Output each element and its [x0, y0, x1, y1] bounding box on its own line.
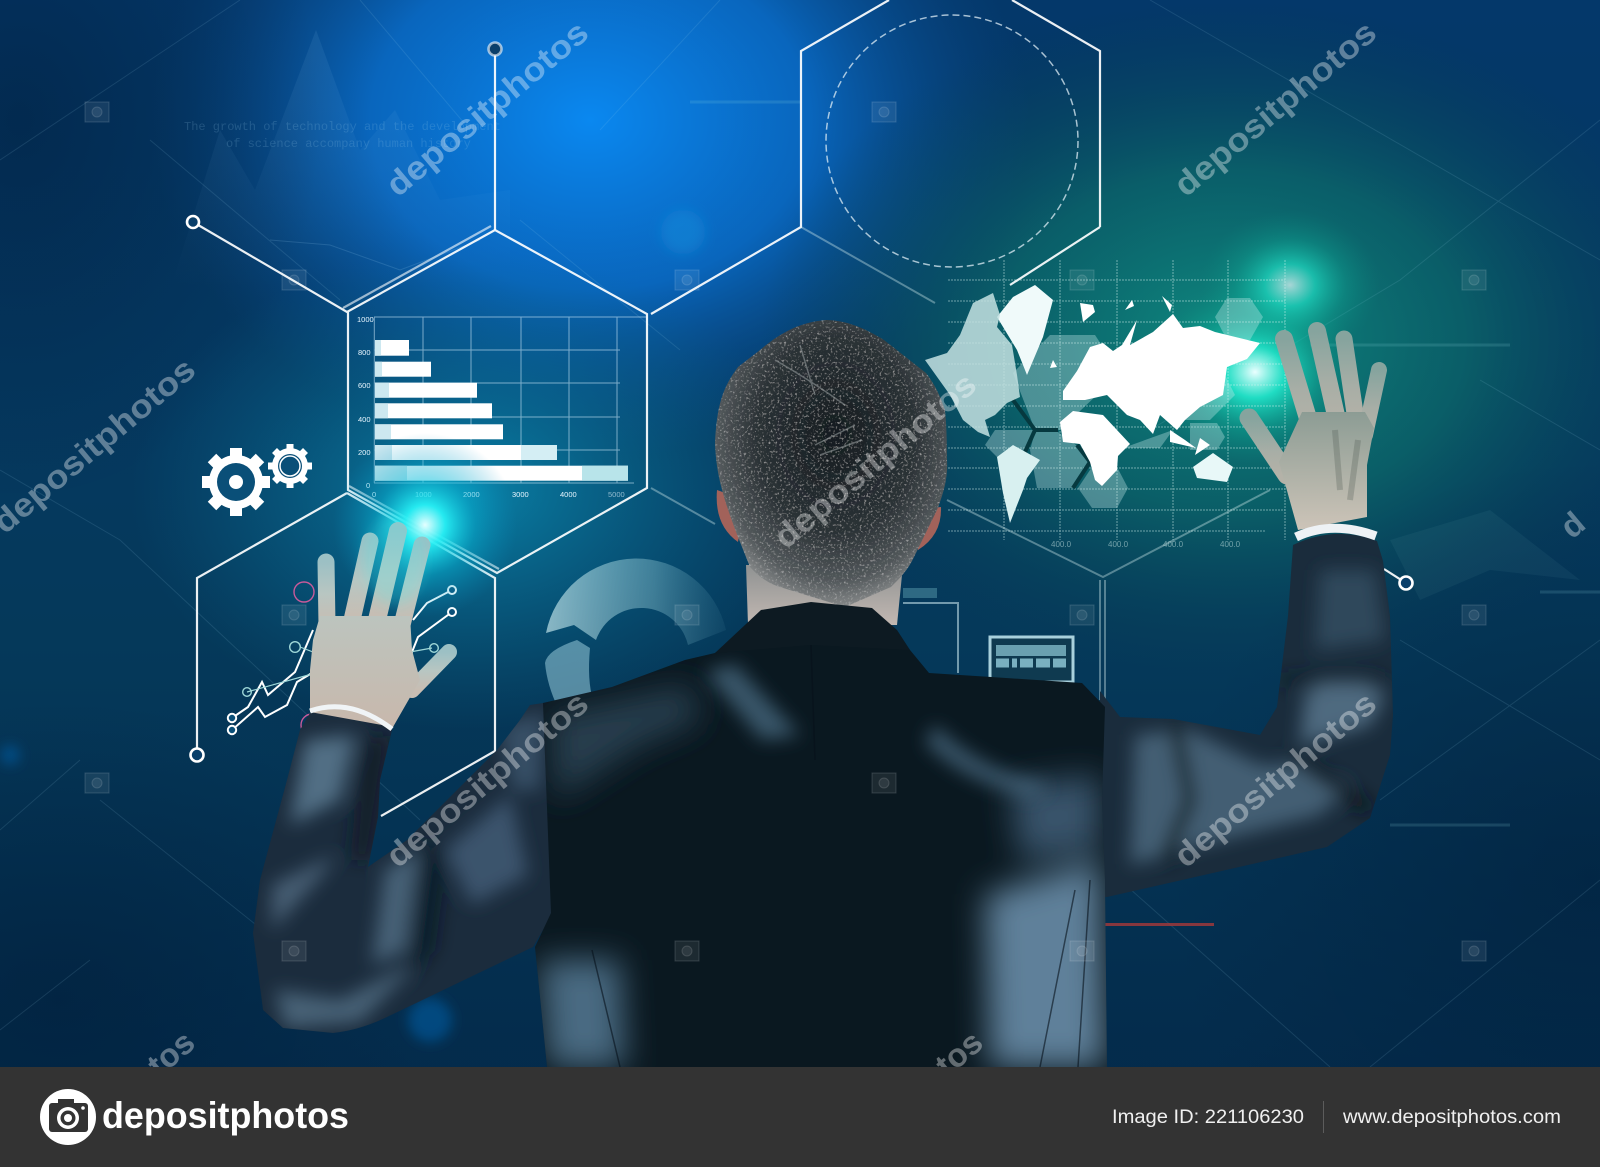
- watermark texts: depositphotos: [378, 13, 595, 203]
- Africa: [1060, 411, 1130, 486]
- South America: [997, 445, 1040, 523]
- dashed circle: [826, 15, 1078, 267]
- faint background caption: The growth of technology and the development: [184, 120, 501, 134]
- chart axis labels: [357, 315, 625, 499]
- chart axis labels: 5000: [608, 490, 625, 499]
- map grid: [948, 260, 1285, 540]
- chart axis labels: 2000: [463, 490, 480, 499]
- interface panels: [903, 588, 1073, 682]
- chart axis labels: 1000: [357, 315, 374, 324]
- watermark texts: tos: [928, 1023, 989, 1083]
- islands: [1050, 296, 1210, 455]
- chart axis labels: 4000: [560, 490, 577, 499]
- bars: [375, 340, 628, 481]
- neck: [746, 565, 903, 625]
- knuckle shadows: [1335, 430, 1358, 500]
- panel outline: [903, 603, 958, 673]
- line chart lower left: [228, 582, 456, 736]
- map axis labels: 400.0: [1220, 540, 1241, 549]
- businessman: [245, 320, 1410, 1070]
- map axis labels: 400.0: [1163, 540, 1184, 549]
- bar chart: [357, 315, 646, 499]
- watermark texts: depositphotos: [1166, 684, 1383, 874]
- hair crown strands: [775, 345, 862, 455]
- palm: [1279, 412, 1374, 530]
- line end nodes: [187, 42, 1412, 762]
- chart axis labels: 3000: [512, 490, 529, 499]
- left sleeve: [253, 703, 551, 1033]
- Eurasia: [1063, 314, 1260, 434]
- jacket body: [535, 645, 1107, 1067]
- chart axis labels: 800: [358, 348, 371, 357]
- panel bar: [903, 588, 937, 598]
- chart axis labels: 400: [358, 415, 371, 424]
- watermark texts: d: [1553, 504, 1592, 545]
- image id: Image ID: 221106230: [1112, 1107, 1304, 1128]
- fingers: [326, 531, 449, 690]
- watermark texts: depositphotos: [766, 365, 983, 555]
- faint background caption: of science accompany human history: [226, 137, 471, 151]
- chart axis labels: 0: [372, 490, 376, 499]
- right sleeve: [1100, 534, 1393, 897]
- large gear: [202, 448, 270, 516]
- hexagon network lines: [193, 0, 1406, 816]
- chart axis labels: 600: [358, 381, 371, 390]
- icon: depositphotos logo: [40, 1089, 96, 1145]
- website url: www.depositphotos.com: [1342, 1107, 1561, 1128]
- Greenland: [997, 285, 1053, 375]
- chart grid: [374, 317, 646, 483]
- keyboard widget: [990, 637, 1073, 682]
- donut chart: [545, 559, 726, 708]
- footer separator: [1323, 1101, 1324, 1133]
- map axis labels: 400.0: [1108, 540, 1129, 549]
- North America: [925, 293, 1020, 437]
- hair: [715, 320, 947, 607]
- watermark texts: tos: [140, 1023, 201, 1083]
- glow over left fingertips: [363, 515, 427, 605]
- world map panel: [925, 260, 1285, 549]
- cuff: [1296, 528, 1376, 537]
- map hexagons: [985, 298, 1263, 508]
- ears: [717, 490, 941, 550]
- glow behind right hand: [1150, 210, 1380, 464]
- right hand: [1249, 331, 1379, 537]
- jacket collar: [715, 602, 910, 653]
- watermark texts: depositphotos: [378, 684, 595, 874]
- Australia: [1193, 453, 1233, 482]
- dark map connectors: [1013, 400, 1090, 488]
- map axis labels: 400.0: [1051, 540, 1072, 549]
- glow behind left hand: [333, 433, 517, 617]
- cuff: [310, 707, 392, 729]
- fingers: [1249, 331, 1379, 475]
- chart axis labels: 1000: [415, 490, 432, 499]
- faint background caption: [184, 120, 501, 151]
- dim hexagon lines: [651, 227, 1270, 700]
- watermark texts: depositphotos: [1166, 13, 1383, 203]
- palm: [310, 616, 420, 727]
- chart axis labels: 0: [366, 481, 370, 490]
- footer bar: [0, 1067, 1600, 1167]
- left hand: [310, 531, 449, 729]
- jacket seams: [592, 645, 1090, 1067]
- map axis labels: [1051, 540, 1241, 549]
- continents: [925, 285, 1260, 523]
- chart axis labels: 200: [358, 448, 371, 457]
- small gear: [268, 444, 312, 488]
- icon: gears: [202, 444, 312, 516]
- watermark camera icons: [85, 102, 1486, 961]
- footer brand name: depositphotos: [102, 1095, 349, 1136]
